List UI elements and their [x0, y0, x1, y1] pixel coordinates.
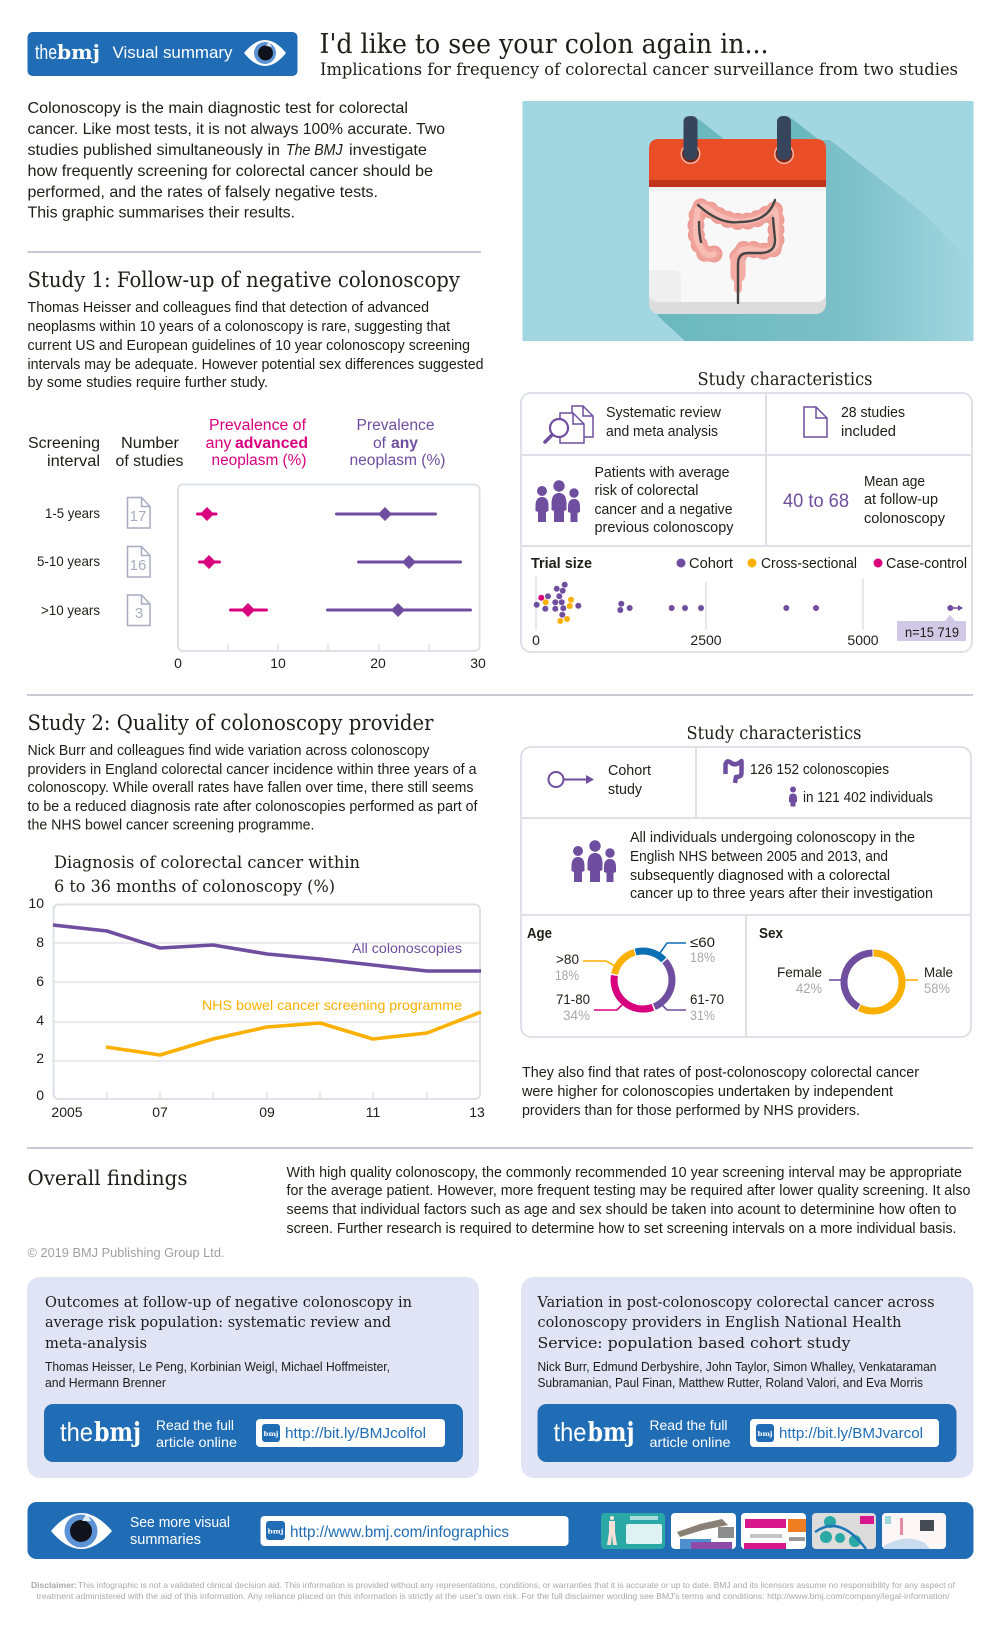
panel: reference card, study 1 [27, 1277, 479, 1478]
trial size dot plot: Cohort [689, 556, 733, 572]
cell text: in 121 402 individuals [803, 790, 933, 806]
study 2 text block: the NHS bowel cancer screening programme. [28, 818, 314, 834]
thumbnail: cirrhosis infographic [812, 1513, 876, 1549]
forest plot: column headers: neoplasm (%) [350, 452, 446, 469]
link button [538, 1404, 956, 1462]
heading: Study 1: Study 1: Follow-up of negative colonoscopy [28, 268, 460, 292]
forest plot: rows: 17 [130, 508, 146, 525]
panel: reference card, study 2: Nick Burr, Edmund Derbyshire, John Taylor, Simon Whalley, Venkataraman [538, 1360, 937, 1374]
study 1 text block: by some studies require further study. [28, 375, 268, 391]
footer bar: see more visual summaries: See more visual [130, 1515, 230, 1531]
forest plot: column headers: any [391, 435, 418, 452]
age donut chart: >80 [556, 951, 579, 967]
link button: Read the full [650, 1417, 728, 1433]
icon: single document [804, 407, 827, 437]
colon shape [696, 200, 776, 303]
line chart: 10 [28, 895, 44, 911]
study 2 text block [28, 743, 478, 834]
forest plot: rows: 20 [370, 655, 386, 671]
study 2 text block: Nick Burr and colleagues find wide variation across colonoscopy [28, 743, 430, 759]
disclaimer: Disclaimer: [31, 1580, 77, 1590]
icon: eye [51, 1513, 112, 1549]
trial size dot plot: n=15 719 [905, 624, 959, 640]
intro text block [28, 100, 445, 222]
cell text [594, 405, 946, 536]
forest plot: column headers: Number [121, 435, 179, 452]
forest plot: column headers: of [373, 435, 387, 452]
forest plot: rows: 3 [135, 605, 143, 622]
icon: people group [572, 840, 616, 882]
age donut chart: 18% [555, 967, 579, 983]
footer bar: see more visual summaries: bmj [268, 1528, 284, 1536]
study 1 text block: intervals may be adequate. However potential sex differences suggested [28, 357, 484, 373]
post-colonoscopy text block [521, 1065, 919, 1119]
cell text: cancer and a negative [594, 502, 732, 518]
icon: cohort arrow [548, 772, 594, 787]
trial size dot plot: 2500 [690, 632, 722, 648]
overall findings text block [286, 1165, 970, 1237]
cell text: Systematic review [606, 405, 722, 421]
forest plot: rows [37, 484, 486, 671]
icon: review documents [545, 406, 593, 443]
subtitle: Implications for frequency of colorectal cancer surveillance from two studies [320, 60, 958, 80]
age donut chart [527, 926, 724, 1023]
link button: bmj [264, 1430, 278, 1438]
title: I'd like to see your colon again in... [320, 29, 768, 60]
post-colonoscopy text block: providers than for those performed by NHS providers. [522, 1103, 860, 1119]
line chart: 2005 [51, 1104, 83, 1120]
forest plot: column headers [28, 417, 446, 470]
link button: Read the full [156, 1417, 234, 1433]
header badge: thebmj Visual summary: bmj [57, 40, 100, 64]
icon: people group [536, 480, 580, 522]
forest plot: column headers: Screening [28, 435, 100, 452]
link button: http://bit.ly/BMJcolfol [285, 1426, 426, 1442]
forest plot: rows: 10 [270, 655, 286, 671]
forest plot: rows: 1-5 years [45, 505, 100, 521]
link button [44, 1404, 463, 1462]
chart title: Diagnosis of colorectal cancer within [54, 853, 360, 873]
heading: study 2 characteristics: Study characteristics [686, 724, 862, 744]
intro text block: how frequently screening for colorectal cancer should be [28, 163, 433, 180]
header badge: thebmj Visual summary: Visual summary [112, 43, 233, 62]
cell text: 126 152 colonoscopies [750, 762, 889, 778]
age donut chart: 18% [690, 949, 715, 965]
forest plot: rows: 5-10 years [37, 553, 100, 569]
divider [27, 1147, 973, 1149]
sex donut chart: Male [924, 964, 953, 980]
cell text: Patients with average [594, 465, 730, 481]
icon: person [789, 786, 797, 806]
panel: study 2 characteristics [521, 747, 971, 1037]
cell text: subsequently diagnosed with a colorectal [630, 868, 890, 884]
link button: http://bit.ly/BMJvarcol [779, 1426, 923, 1442]
panel: reference card, study 1: Outcomes at follow-up of negative colonoscopy in [45, 1295, 412, 1311]
trial size dot plot: Cross-sectional [761, 556, 857, 572]
line chart: 07 [152, 1104, 168, 1120]
forest plot: column headers: Prevalence [356, 417, 434, 434]
trial size dot plot: Case-control [886, 556, 967, 572]
intro text block: Colonoscopy is the main diagnostic test for colorectal [28, 100, 408, 117]
header badge: thebmj Visual summary: the [35, 42, 57, 64]
link button: bmj [758, 1430, 772, 1438]
cell text: All individuals undergoing colonoscopy in the [630, 830, 915, 846]
cell text: risk of colorectal [594, 483, 698, 499]
cell text: at follow-up [864, 492, 938, 508]
forest plot: rows: >10 years [41, 602, 100, 618]
intro text block: This graphic summarises their results. [28, 204, 295, 222]
line chart: 6 [36, 973, 44, 989]
sex donut chart [759, 926, 953, 1011]
forest plot: rows: 0 [174, 655, 182, 671]
line chart: NHS bowel cancer screening programme [202, 997, 462, 1013]
heading: Study 2: Study 2: Quality of colonoscopy provider [28, 711, 434, 735]
link button: bmj [94, 1418, 141, 1448]
disclaimer: This infographic is not a validated clinical decision aid. This information is provided without any representations, conditions, or warranties that it is accurate or up to date. BMJ and its licensors assume no responsibility for any aspect of [78, 1580, 956, 1590]
disclaimer: treatment administered with the aid of this information. Any reliance placed on this information is strictly at the user's own risk. For the full disclaimer wording see BMJ's terms and conditions: http://www.bmj.com/company/legal-information/ [36, 1591, 950, 1601]
divider [28, 251, 481, 253]
forest plot: rows: 16 [130, 557, 146, 574]
forest plot: column headers: advanced [235, 435, 308, 452]
line chart [28, 895, 485, 1120]
intro text block: investigate [349, 142, 427, 159]
heading: study 1 characteristics: Study characteristics [698, 370, 873, 390]
forest plot: column headers: Prevalence of [209, 417, 307, 434]
line chart: 13 [469, 1104, 485, 1120]
study 1 text block: Thomas Heisser and colleagues find that detection of advanced [28, 300, 429, 316]
footer bar: see more visual summaries [28, 1502, 974, 1559]
cell text: Cohort [608, 763, 651, 779]
panel: reference card, study 2: Service: population based cohort study [538, 1336, 851, 1352]
intro text block: The BMJ [286, 142, 343, 159]
divider [27, 694, 973, 696]
panel: reference card, study 2 [521, 1277, 974, 1478]
heading: Overall findings: Overall findings [28, 1166, 188, 1190]
forest plot: column headers: neoplasm (%) [212, 452, 306, 469]
intro text block: performed, and the rates of falsely negative tests. [28, 184, 378, 201]
disclaimer [31, 1580, 956, 1601]
panel: reference card, study 2: Subramanian, Paul Finan, Matthew Rutter, Roland Valori, and Eva Morris [538, 1376, 923, 1390]
intro text block: studies published simultaneously in [28, 142, 280, 159]
mean age figure: 40 to 68 [783, 490, 849, 512]
post-colonoscopy text block: were higher for colonoscopies undertaken by independent [521, 1084, 893, 1100]
link button: bmj [588, 1418, 634, 1448]
forest plot: rows: 30 [470, 655, 486, 671]
overall findings text block: With high quality colonoscopy, the commonly recommended 10 year screening interval may be appropriate [286, 1165, 962, 1181]
link button: the [554, 1417, 586, 1447]
trial size dot plot [531, 556, 967, 648]
study 2 text block: to be a reduced diagnosis rate after colonoscopies performed as part of [28, 799, 478, 815]
line chart: 4 [36, 1012, 44, 1028]
study 1 text block [28, 300, 484, 391]
line chart: 8 [36, 934, 44, 950]
icon: colon [726, 761, 742, 783]
intro text block: cancer. Like most tests, it is not always 100% accurate. Two [28, 121, 445, 138]
thumbnail: hospital infographic [882, 1513, 946, 1549]
study 1 text block: current US and European guidelines of 10 year colonoscopy screening [28, 338, 470, 354]
thumbnail: grey infographic [671, 1513, 736, 1549]
overall findings text block: seems that individual factors such as age and sex should be taken into acount to determinine how often to [286, 1202, 956, 1218]
panel: reference card, study 1: meta-analysis [45, 1336, 147, 1352]
cell text: previous colonoscopy [594, 520, 734, 536]
thumbnail: pink and orange infographic [741, 1513, 806, 1549]
age donut chart: 71-80 [556, 991, 590, 1007]
age donut chart: 31% [690, 1007, 715, 1023]
line chart: All colonoscopies [352, 940, 462, 956]
trial size dot plot: 5000 [847, 632, 879, 648]
link button: article online [156, 1434, 237, 1450]
trial size dot plot: 0 [532, 632, 540, 648]
thumbnail: teal infographic [601, 1513, 665, 1549]
cell text: colonoscopy [864, 511, 946, 527]
line chart: 11 [366, 1104, 380, 1120]
chart title: 6 to 36 months of colonoscopy (%) [54, 877, 335, 897]
age donut chart: ≤60 [690, 934, 715, 950]
line chart: 2 [36, 1050, 44, 1066]
sex donut chart: 42% [796, 980, 822, 996]
sex donut chart: 58% [924, 980, 950, 996]
age donut chart: 61-70 [690, 991, 724, 1007]
forest plot: column headers: any [206, 435, 232, 452]
line chart: 0 [36, 1087, 44, 1103]
study 2 text block: providers in England colorectal cancer incidence within three years of a [28, 762, 477, 778]
cell text: cancer up to three years after their investigation [630, 886, 933, 902]
chart title [54, 853, 360, 897]
illustration: calendar with colon [522, 101, 974, 341]
panel: reference card, study 1: Thomas Heisser, Le Peng, Korbinian Weigl, Michael Hoffmeister, [45, 1360, 390, 1374]
cell text: included [841, 424, 896, 440]
panel: reference card, study 2: Variation in post-colonoscopy colorectal cancer across [537, 1295, 934, 1311]
cell text: Mean age [864, 474, 925, 490]
post-colonoscopy text block: They also find that rates of post-colonoscopy colorectal cancer [522, 1065, 919, 1081]
age donut chart: 34% [563, 1007, 590, 1023]
link button: article online [650, 1434, 731, 1450]
forest plot: column headers: of studies [116, 453, 184, 470]
sex donut chart: Female [777, 964, 822, 980]
age donut chart: Age [527, 926, 552, 942]
footer bar: see more visual summaries: summaries [130, 1532, 201, 1548]
panel: reference card, study 1: and Hermann Brenner [45, 1376, 166, 1390]
cell text: and meta analysis [606, 424, 718, 440]
panel: study 1 characteristics [521, 393, 972, 652]
overall findings text block: for the average patient. However, more frequent testing may be required after lower quality screening. It also [286, 1183, 970, 1199]
cell text: 28 studies [841, 405, 905, 421]
study 1 text block: neoplasms within 10 years of a colonoscopy is rare, suggesting that [28, 319, 450, 335]
trial size dot plot: Trial size [531, 556, 592, 572]
cell text: study [608, 782, 643, 798]
copyright: © 2019 BMJ Publishing Group Ltd. [28, 1245, 224, 1260]
forest plot: column headers: interval [47, 453, 100, 470]
overall findings text block: screen. Further research is required to determine how to set screening intervals on a more individual basis. [286, 1221, 956, 1237]
study 2 text block: colonoscopy. While overall rates have fallen over time, there still seems [28, 780, 474, 796]
cell text [608, 762, 933, 902]
panel: reference card, study 1: average risk population: systematic review and [45, 1315, 391, 1331]
line chart: 09 [259, 1104, 275, 1120]
link button: the [60, 1417, 93, 1447]
panel: reference card, study 2: colonoscopy providers in English National Health [538, 1315, 902, 1331]
header badge: thebmj Visual summary [28, 32, 298, 76]
cell text: English NHS between 2005 and 2013, and [630, 849, 888, 865]
footer bar: see more visual summaries: http://www.bmj.com/infographics [290, 1524, 509, 1541]
sex donut chart: Sex [759, 926, 783, 942]
